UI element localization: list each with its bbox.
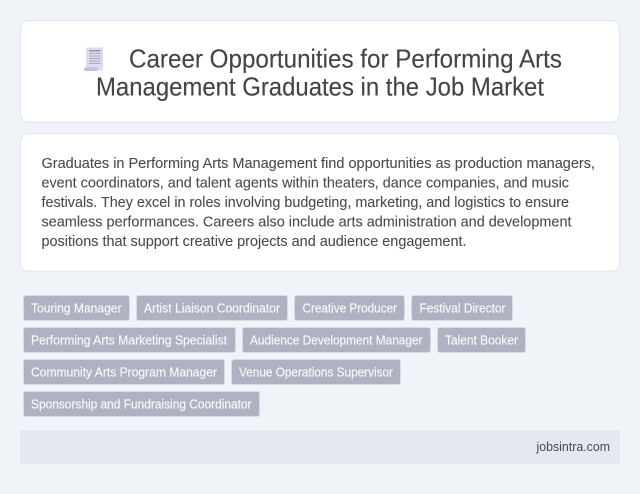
- tag: Sponsorship and Fundraising Coordinator: Sponsorship and Fundraising Coordinator: [31, 398, 252, 412]
- icon: scroll document: [84, 48, 103, 71]
- tag: Talent Booker: Talent Booker: [445, 334, 518, 348]
- text block: description: festivals. They excel in roles involving budgeting, marketing, and logistics to ensure: [42, 195, 569, 211]
- text block: description: seamless performances. Careers also include arts administration and development: [42, 214, 572, 230]
- tag: Touring Manager: [24, 296, 130, 320]
- text block: description: [42, 156, 595, 250]
- tag: Performing Arts Marketing Specialist: Performing Arts Marketing Specialist: [31, 334, 227, 348]
- tag: Community Arts Program Manager: Community Arts Program Manager: [31, 366, 217, 380]
- panel: title card: [20, 20, 620, 122]
- tag: Festival Director: Festival Director: [420, 302, 506, 316]
- tag: Creative Producer: [294, 296, 404, 320]
- footer bar: [20, 430, 620, 464]
- tag: Artist Liaison Coordinator: Artist Liaison Coordinator: [144, 302, 280, 316]
- title: Management Graduates in the Job Market: [96, 74, 544, 102]
- tag: Audience Development Manager: Audience Development Manager: [250, 334, 422, 348]
- tag: Audience Development Manager: [242, 328, 430, 352]
- tag: Performing Arts Marketing Specialist: [24, 328, 236, 352]
- title: [96, 46, 562, 102]
- text block: description: Graduates in Performing Arts Management find opportunities as production managers,: [42, 156, 595, 172]
- text block: description: positions that support creative projects and audience engagement.: [42, 234, 466, 250]
- footer site name: jobsintra.com: [536, 439, 610, 454]
- tag: Venue Operations Supervisor: Venue Operations Supervisor: [239, 366, 393, 380]
- tag list: [24, 296, 526, 416]
- tag: Community Arts Program Manager: [24, 360, 224, 384]
- tag: Festival Director: [412, 296, 512, 320]
- tag: Venue Operations Supervisor: [232, 360, 400, 384]
- tag: Creative Producer: Creative Producer: [302, 302, 397, 316]
- tag: Talent Booker: [438, 328, 526, 352]
- tag: Touring Manager: Touring Manager: [31, 302, 122, 316]
- tag: Sponsorship and Fundraising Coordinator: [24, 392, 260, 416]
- text block: description: event coordinators, and talent agents within theaters, dance companies, and music: [42, 176, 569, 192]
- title: Career Opportunities for Performing Arts: [129, 46, 562, 74]
- tag: Artist Liaison Coordinator: [136, 296, 288, 320]
- panel: description card: [20, 134, 620, 271]
